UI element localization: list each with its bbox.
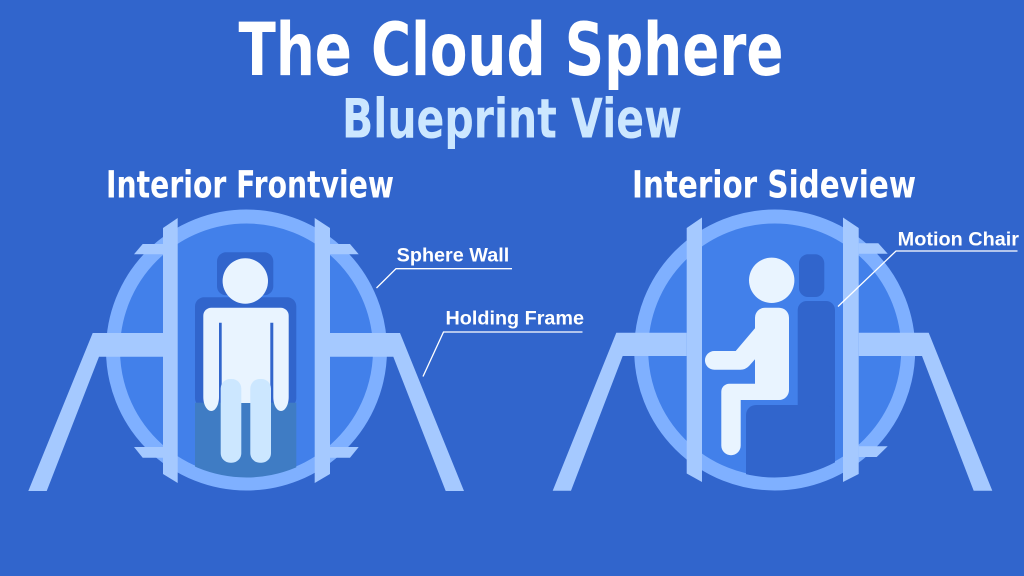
title: The Cloud Sphere: [238, 9, 784, 93]
callout: sphere wall: Sphere Wall: [397, 245, 509, 267]
callout: motion chair: [838, 228, 1019, 306]
panel: sideview diagram: [553, 216, 992, 495]
motion chair front: [195, 252, 296, 483]
panel: frontview diagram: [28, 216, 464, 491]
callout: holding frame: Holding Frame: [446, 307, 584, 329]
heading: interior sideview: Interior Sideview: [632, 163, 916, 206]
person front: [203, 258, 289, 463]
holding frame side: [553, 218, 992, 491]
heading: interior frontview: Interior Frontview: [106, 163, 394, 206]
motion chair side: [746, 254, 835, 495]
callout: motion chair: Motion Chair: [898, 228, 1019, 250]
holding frame front: [28, 218, 464, 491]
sphere wall: [113, 216, 380, 484]
subtitle: Blueprint View: [342, 88, 682, 151]
person side: [705, 258, 794, 455]
callout: holding frame: [423, 307, 584, 376]
callout: sphere wall: [376, 245, 512, 288]
sphere wall: [641, 216, 908, 484]
